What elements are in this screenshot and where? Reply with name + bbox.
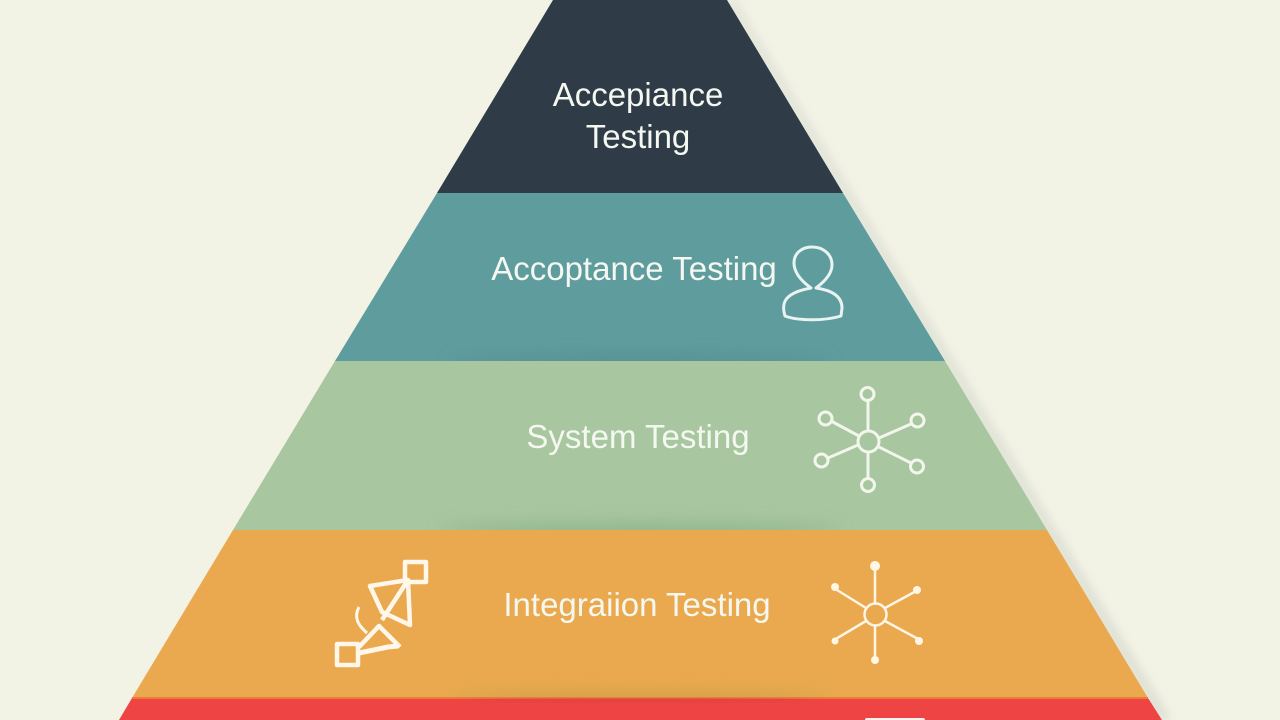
panel: top tier: Testing: [586, 118, 690, 155]
heading: top tier label: Accepiance: [553, 76, 723, 113]
heading: system testing label: System Testing: [526, 418, 750, 455]
panel: top tier: [437, 0, 843, 193]
panel: base tier: [119, 696, 1162, 720]
icon: network star: [831, 561, 923, 664]
icon: linked squares: [337, 562, 426, 665]
panel: system testing tier: [233, 361, 1047, 538]
panel: acceptance testing tier: [335, 193, 945, 367]
heading: acceptance testing label: Accoptance Testing: [491, 250, 777, 287]
panel: integration testing tier: [132, 530, 1148, 706]
icon: base tier icon top edge: [865, 718, 925, 720]
icon: user: [784, 247, 842, 320]
icon: network hub: [815, 388, 924, 492]
heading: integration testing label: Integraiion Testing: [503, 586, 771, 623]
